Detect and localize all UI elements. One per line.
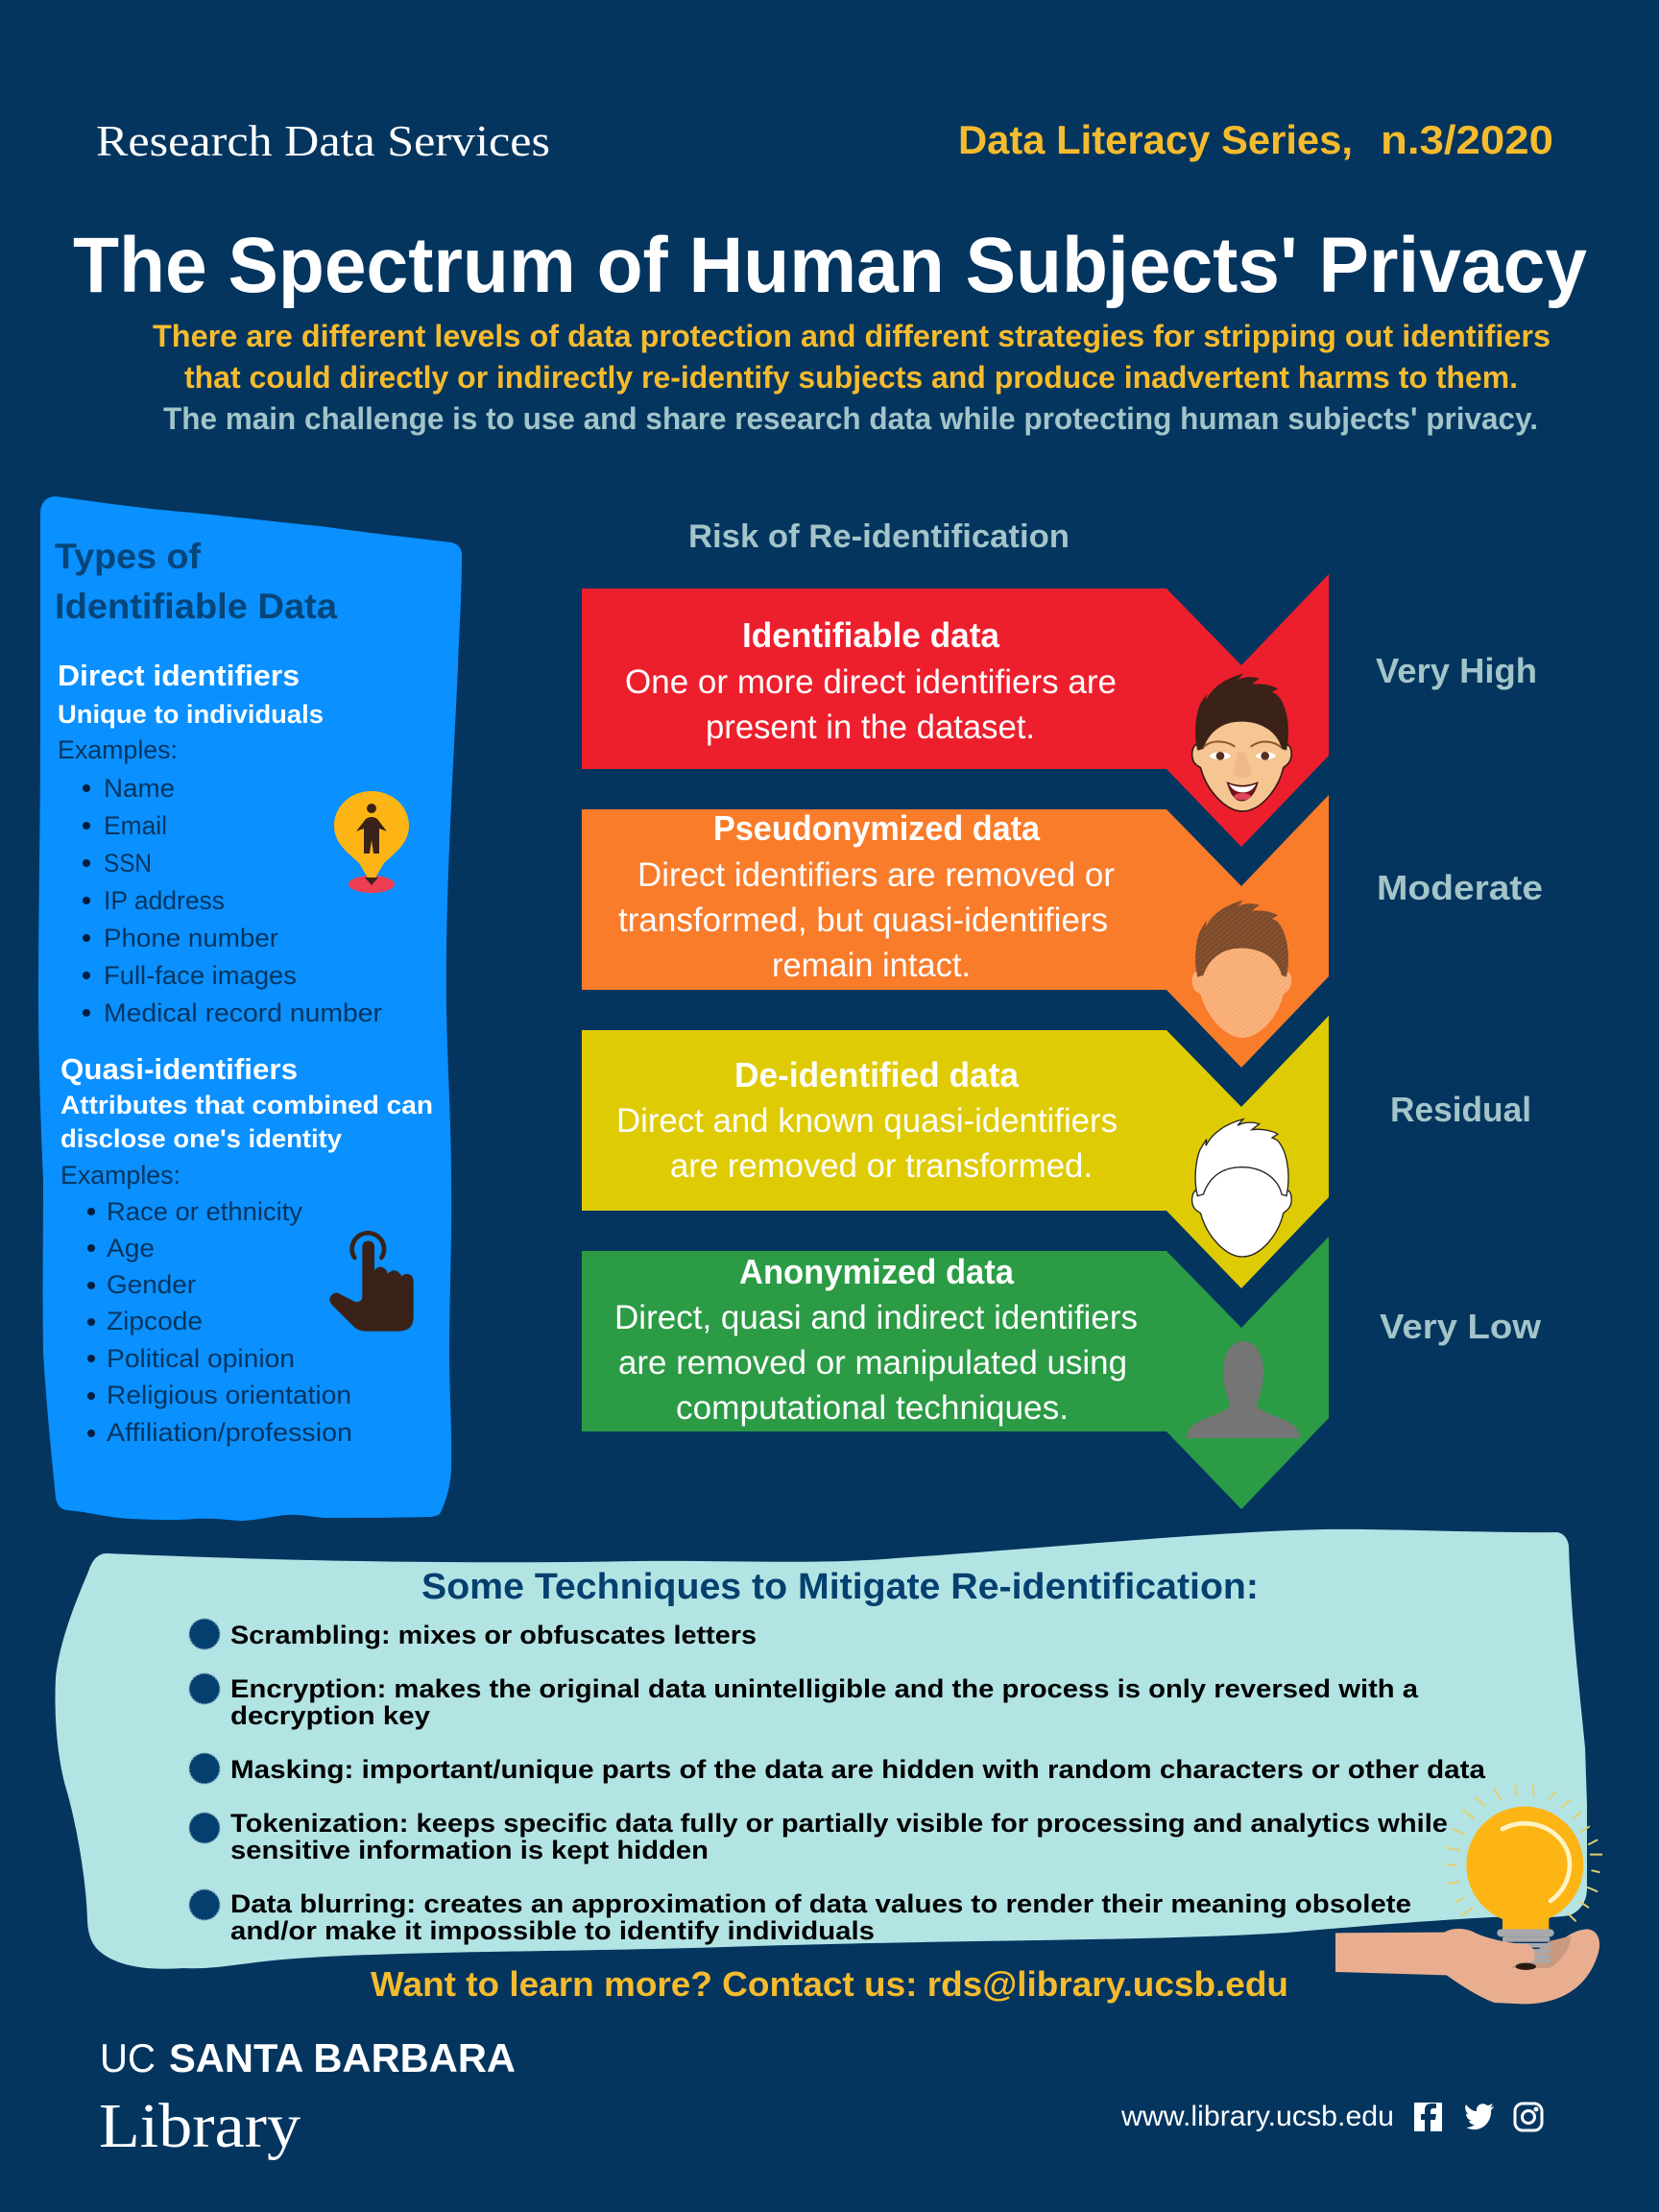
quasi-identifiers heading: Quasi-identifiers (60, 1052, 298, 1086)
risk label: very low: Very Low (1380, 1307, 1542, 1346)
band text: Identifiable data (742, 615, 1000, 655)
technique: tokenization (189, 1809, 1448, 1864)
footer: university logo: Library (99, 2091, 301, 2161)
header: department name: Research Data Services (96, 117, 550, 165)
footer: university logo: SANTA BARBARA (169, 2035, 516, 2080)
direct identifiers examples: Phone number (104, 924, 278, 952)
direct identifiers examples (58, 735, 382, 1027)
panel: types of identifiable data (38, 496, 462, 1521)
technique: masking: Masking: important/unique parts of the data are hidden with random characters or other data (230, 1755, 1486, 1784)
header: series label: Data Literacy Series, (958, 117, 1353, 162)
quasi-identifiers heading: disclose one's identity (60, 1124, 342, 1153)
icon: twitter (1465, 2104, 1494, 2129)
band: de-identified data (residual risk) (582, 1016, 1329, 1288)
contact line: Want to learn more? Contact us: rds@library.ucsb.edu (371, 1964, 1288, 2004)
band: anonymized data (very low risk) (582, 1237, 1329, 1509)
footer: website: www.library.ucsb.edu (1120, 2101, 1394, 2132)
band: identifiable data (very high risk) (582, 574, 1329, 847)
intro text: There are different levels of data protection and different strategies for stripping out identifiers (153, 319, 1551, 353)
technique: data blurring (189, 1889, 1411, 1945)
intro text: The main challenge is to use and share research data while protecting human subjects' privacy. (163, 401, 1538, 436)
quasi-identifiers examples: Religious orientation (107, 1381, 351, 1409)
band text: transformed, but quasi-identifiers (618, 902, 1108, 939)
band text: One or more direct identifiers are (625, 663, 1117, 701)
band text: Direct identifiers are removed or (637, 856, 1115, 894)
band text: Direct, quasi and indirect identifiers (614, 1299, 1138, 1336)
direct identifiers examples: Name (104, 774, 175, 803)
band text (625, 615, 1117, 746)
intro text (153, 319, 1551, 436)
band text: present in the dataset. (706, 709, 1035, 746)
band text: Anonymized data (739, 1252, 1015, 1291)
risk label: moderate: Moderate (1377, 868, 1543, 907)
band text: are removed or manipulated using (618, 1344, 1127, 1382)
band text (616, 1055, 1118, 1185)
direct identifiers examples: Examples: (58, 735, 178, 764)
quasi-identifiers examples: Political opinion (107, 1344, 295, 1373)
footer: university logo (99, 2035, 516, 2161)
header: series label (958, 117, 1553, 162)
intro text: that could directly or indirectly re-identify subjects and produce inadvertent harms to them. (184, 360, 1518, 395)
technique: encryption: Encryption: makes the original data unintelligible and the process is only reversed with a (230, 1674, 1419, 1703)
direct identifiers examples: IP address (104, 886, 225, 915)
direct identifiers examples: SSN (104, 849, 152, 878)
quasi-identifiers examples: Race or ethnicity (107, 1197, 303, 1226)
panel heading: Types of (55, 537, 202, 576)
band text (618, 808, 1115, 984)
risk chart heading: Risk of Re-identification (688, 518, 1070, 555)
technique: tokenization: Tokenization: keeps specific data fully or partially visible for processing and analytics while (230, 1809, 1448, 1838)
band text: De-identified data (734, 1055, 1020, 1094)
technique: encryption: decryption key (230, 1701, 430, 1730)
quasi-identifiers heading (60, 1052, 433, 1153)
icon: hand holding light bulb (1335, 1785, 1601, 2004)
direct identifiers examples: Email (104, 811, 167, 840)
header: series label: n.3/2020 (1381, 117, 1553, 162)
technique: tokenization: sensitive information is kept hidden (230, 1836, 709, 1864)
icon: gray silhouette (1187, 1341, 1300, 1438)
band text: are removed or transformed. (670, 1147, 1093, 1185)
icon: full face (1192, 674, 1291, 811)
footer: university logo: UC (100, 2035, 156, 2080)
icon: face with hidden features (1192, 901, 1291, 1038)
technique: encryption (189, 1673, 1419, 1730)
quasi-identifiers examples (60, 1161, 352, 1447)
direct identifiers examples: Full-face images (104, 961, 297, 990)
icon: facebook (1414, 2103, 1442, 2131)
title: The Spectrum of Human Subjects' Privacy (73, 222, 1587, 309)
band text: remain intact. (772, 947, 971, 984)
quasi-identifiers examples: Affiliation/profession (107, 1418, 352, 1447)
band text: Pseudonymized data (713, 808, 1041, 848)
technique: data blurring: and/or make it impossible to identify individuals (230, 1916, 875, 1945)
quasi-identifiers heading: Attributes that combined can (60, 1091, 433, 1119)
panel: mitigation techniques (55, 1529, 1587, 1969)
risk label: residual: Residual (1390, 1090, 1531, 1129)
quasi-identifiers examples: Examples: (60, 1161, 180, 1190)
quasi-identifiers examples: Zipcode (107, 1307, 203, 1335)
icon: location pin with person (334, 791, 409, 893)
direct identifiers examples: Medical record number (104, 998, 382, 1027)
panel heading: Some Techniques to Mitigate Re-identification: (421, 1567, 1259, 1607)
quasi-identifiers examples: Age (107, 1234, 155, 1262)
direct identifiers heading: Unique to individuals (58, 700, 324, 729)
risk label: very high: Very High (1376, 651, 1537, 690)
band text (614, 1252, 1138, 1427)
technique: data blurring: Data blurring: creates an approximation of data values to render their meaning obsolete (230, 1889, 1411, 1918)
icon: blank white head (1192, 1119, 1291, 1257)
direct identifiers heading (58, 659, 324, 729)
band: pseudonymized data (moderate risk) (582, 795, 1329, 1068)
direct identifiers heading: Direct identifiers (58, 659, 300, 692)
band text: Direct and known quasi-identifiers (616, 1102, 1118, 1140)
panel heading: Identifiable Data (55, 587, 337, 626)
panel heading (55, 537, 337, 626)
icon: pointing hand (329, 1233, 414, 1332)
quasi-identifiers examples: Gender (107, 1270, 196, 1299)
technique: scrambling: Scrambling: mixes or obfuscates letters (230, 1621, 757, 1649)
band text: computational techniques. (676, 1389, 1069, 1427)
icon: instagram (1515, 2104, 1542, 2130)
